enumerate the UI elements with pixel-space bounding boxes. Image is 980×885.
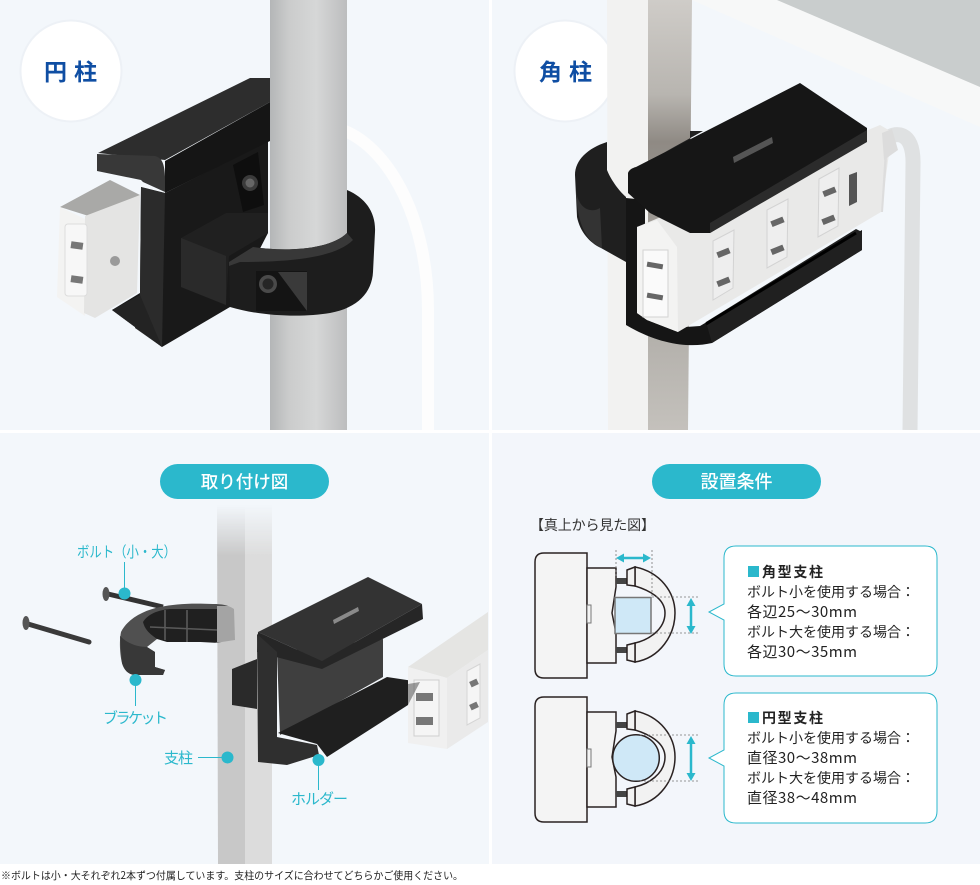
holder back ring (575, 131, 703, 262)
bracket (120, 604, 235, 675)
callout: round pole conditions: 直径30～38mm (747, 747, 857, 768)
footnote: ※ボルトは小・大それぞれ2本ずつ付属しています。支柱のサイズに合わせてどちらかご使用ください。 (1, 868, 463, 883)
callout: bolt (78, 544, 168, 600)
callout: square pole conditions: 各辺30～35mm (747, 641, 857, 662)
label: round pole: 円柱 (44, 53, 104, 87)
label: square pole (516, 22, 607, 120)
diagram: square pole top view (535, 550, 698, 678)
callout: round pole conditions: ボルト小を使用する場合： (747, 728, 915, 748)
heading pill: installation conditions (652, 464, 821, 499)
callout: square pole conditions: 各辺25～30mm (747, 601, 857, 622)
label: square pole: 角柱 (539, 53, 599, 87)
top cover (628, 83, 867, 233)
callout: holder: ホルダー (291, 788, 348, 809)
block connector (268, 233, 269, 234)
callout: support pole (164, 750, 234, 765)
faded power strip (408, 612, 488, 749)
panel: round pole photo (0, 0, 489, 430)
callout: round pole conditions: 円型支柱 (762, 708, 823, 728)
outlets (643, 168, 839, 317)
callout: round pole conditions: 直径38～48mm (747, 787, 857, 808)
arrow: diameter (686, 736, 696, 781)
clamp device (57, 78, 270, 347)
callout: holder (292, 754, 346, 806)
holder (232, 577, 423, 765)
square pole (607, 0, 692, 430)
arrow: depth (686, 598, 696, 634)
callout: round pole conditions: ボルト大を使用する場合： (747, 768, 915, 788)
panel: square pole photo (492, 0, 980, 430)
support pole (217, 505, 272, 864)
ring (229, 190, 375, 316)
callout: bolt: ボルト（小・大） (77, 541, 176, 562)
label: round pole (20, 20, 122, 122)
holder bottom tray (626, 198, 862, 345)
callout: square pole conditions (709, 546, 937, 676)
diagram: round pole top view (535, 697, 698, 822)
table top (777, 0, 980, 87)
gray cable (884, 135, 913, 430)
callout: support pole: 支柱 (164, 747, 193, 768)
callout: square pole conditions: 角型支柱 (762, 562, 823, 582)
power strip (637, 125, 898, 332)
callout: round pole conditions (709, 693, 937, 823)
heading pill: installation diagram (160, 464, 329, 499)
round pole (270, 0, 347, 430)
heading pill: installation conditions: 設置条件 (700, 468, 772, 494)
white cable (345, 131, 428, 430)
callout: square pole conditions: ボルト大を使用する場合： (747, 622, 915, 642)
heading pill: installation diagram: 取り付け図 (201, 469, 288, 494)
device body (112, 141, 268, 347)
top cover (98, 78, 270, 160)
screw plate (233, 152, 264, 212)
panel: installation conditions (492, 433, 980, 864)
bolts (22, 587, 163, 642)
callout: square pole conditions: ボルト小を使用する場合： (747, 582, 915, 602)
outlet block (57, 180, 140, 318)
arrow: width (616, 554, 651, 562)
callout: bracket (104, 674, 166, 724)
callout: bracket: ブラケット (103, 707, 168, 728)
subheading: top view: 【真上から見た図】 (530, 515, 655, 535)
panel: installation diagram (0, 433, 489, 864)
